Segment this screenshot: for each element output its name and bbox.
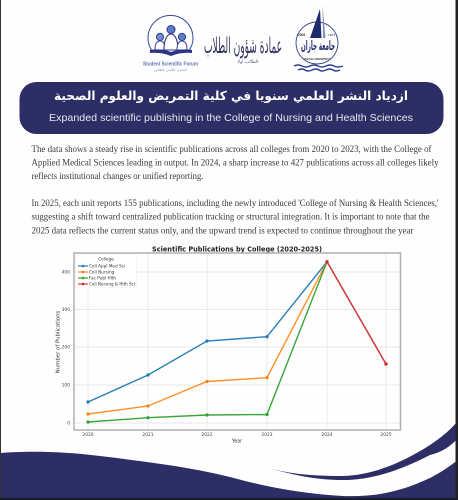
x axis labels: 2024 <box>321 432 333 438</box>
series: Coll Nursing & Hlth Sci <box>325 260 388 366</box>
Arabic heading: ازدياد النشر العلمي سنويا في كلية التمريض والعلوم الصحية <box>54 88 408 104</box>
chart legend: College <box>98 256 114 262</box>
x axis labels: 2021 <box>142 432 154 438</box>
x axis labels: 2022 <box>201 432 213 438</box>
logo: Jazan University seal: JAZAN UNIVERSITY <box>303 57 331 61</box>
y axis labels: 200 <box>62 344 70 350</box>
y axis labels: 100 <box>62 382 70 388</box>
logo: Jazan University seal: ١٤٢٦ <box>328 33 335 37</box>
logo: Student Scientific Forum: Student Scientific Forum <box>143 62 198 68</box>
text: عمادة شؤون الطلاب <box>204 34 282 59</box>
logo: Student Scientific Forum <box>143 15 198 72</box>
chart title: Scientific Publications by College (2020-2025) <box>152 246 322 254</box>
chart legend <box>76 254 136 288</box>
logo: student affairs calligraphy <box>204 34 282 65</box>
title banner <box>20 82 444 134</box>
y axis title: Number of Publications <box>56 310 62 373</box>
chart legend: Fac Publ Hlth <box>89 275 116 280</box>
chart legend: Coll Nursing & Hlth Sci <box>89 281 135 286</box>
text block: first paragraph <box>32 144 439 182</box>
y axis labels: 0 <box>67 420 70 426</box>
series: Fac Publ Hlth <box>86 262 327 424</box>
chart legend: Coll Nursing <box>89 269 115 274</box>
x axis labels: 2020 <box>82 432 94 438</box>
chart: publications by college <box>56 246 400 444</box>
x axis labels: 2025 <box>380 432 392 438</box>
English heading: Expanded scientific publishing in the College of Nursing and Health Sciences <box>49 112 413 124</box>
footer wave <box>0 421 458 500</box>
series: Coll Nursing <box>86 262 327 416</box>
logo: Jazan University seal: 2006 <box>298 33 305 37</box>
series: Coll Appl Med Sci <box>86 262 327 404</box>
x axis labels <box>82 432 392 438</box>
logo: Jazan University seal: جامعة جازان <box>301 39 335 54</box>
footer swoosh <box>272 421 458 480</box>
y axis labels <box>62 270 70 426</box>
y axis labels: 400 <box>62 270 70 276</box>
logo: Jazan University seal <box>294 5 343 71</box>
y axis labels: 300 <box>62 307 70 313</box>
text block: second paragraph <box>32 198 439 236</box>
text block: second paragraph: 2025 data reflects the current status only, and the upward trend is expected to continue throughout the year <box>32 225 414 236</box>
x axis title: Year <box>231 438 242 444</box>
chart legend: Coll Appl Med Sci <box>89 263 125 268</box>
logo: student affairs calligraphy: الطالب أولا <box>238 58 258 65</box>
x axis labels: 2023 <box>261 432 273 438</box>
logo: Student Scientific Forum: المنتدى العلمي الطلابي <box>154 68 187 72</box>
text block: first paragraph: reflects institutional changes or unified reporting. <box>32 171 204 182</box>
